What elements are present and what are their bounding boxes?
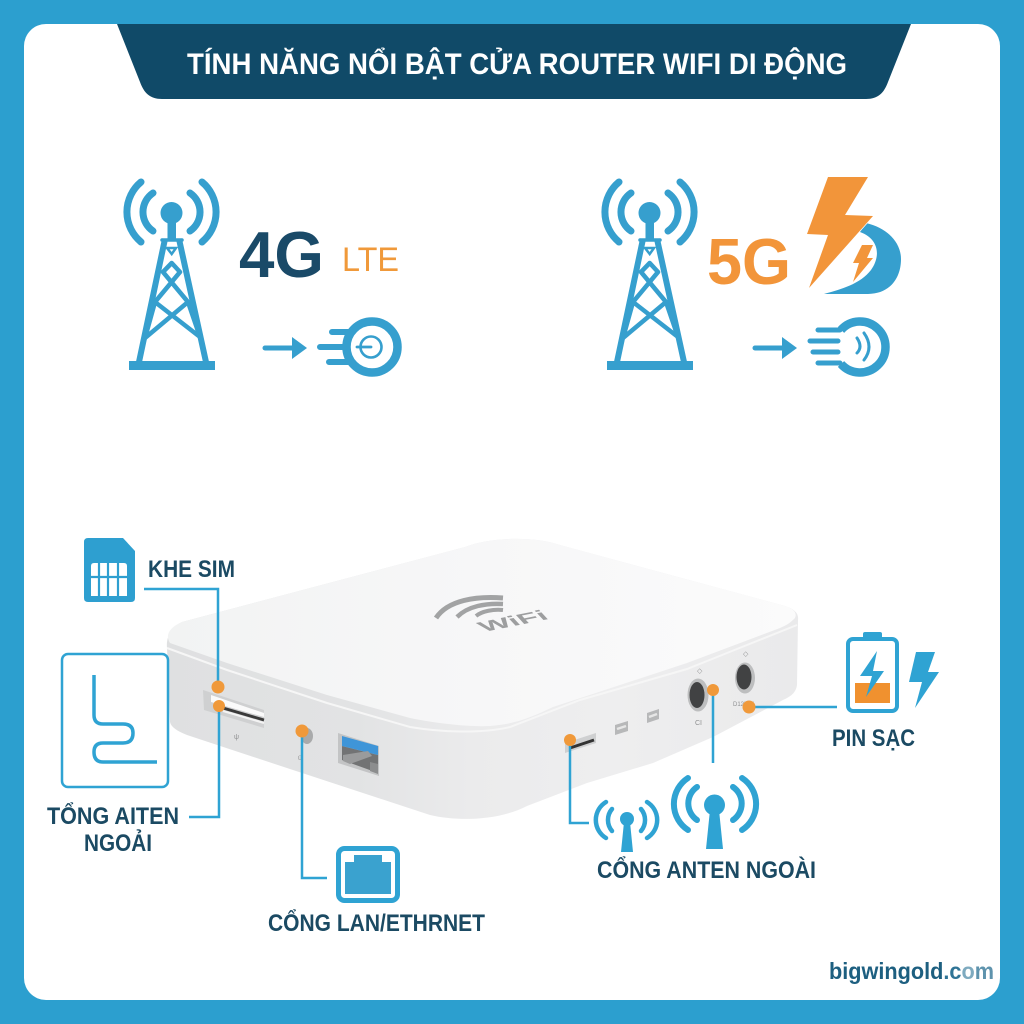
marker [564,734,576,746]
label: CỔNG LAN/ETHRNET [268,909,485,937]
panel: 5G [605,177,901,373]
icon: lightning [909,652,939,708]
tiny port marks: ü [298,755,302,762]
callout: KHE SIM [84,538,235,694]
device top face [168,539,796,726]
tiny port marks: CI [695,720,702,727]
arrow [755,337,797,359]
tiny port marks [234,651,754,762]
icon: 4G cell tower [127,182,216,370]
leader line: side slot [570,745,589,823]
4G label: 4G [239,218,324,291]
device body [167,539,798,819]
wifi logo [436,598,553,635]
tiny port marks: D12MM [733,702,754,708]
marker [296,724,308,738]
title banner [117,24,911,99]
icon: antenna wire [62,654,168,787]
icon: SIM card [84,538,135,602]
callout: PIN SẠC [742,632,939,752]
arrow [265,337,307,359]
panel: 4G LTE [127,182,399,372]
indicator slots [615,709,659,735]
leader line [189,710,219,817]
ethernet port [338,733,379,776]
callout: CỔNG LAN/ETHRNET [268,724,485,937]
label: NGOẢI [84,828,152,857]
antenna jacks [688,662,755,712]
tiny port marks: ψ [234,734,239,741]
label: KHE SIM [148,556,235,583]
callout: TỔNG AITEN NGOẢI [47,654,225,857]
marker [212,680,224,694]
label: PIN SẠC [832,725,915,752]
label: CỔNG ANTEN NGOÀI [597,856,816,884]
5G label: 5G [707,225,791,298]
side slot [565,733,596,753]
callout: CỔNG ANTEN NGOÀI [564,684,816,884]
leader line [144,589,218,683]
marker [213,700,225,712]
marker [707,684,719,696]
leader line: jack [712,693,714,763]
LAN indicator port [301,728,313,744]
tiny port marks: ◇ [743,651,749,658]
leader line [753,706,837,708]
brand logo: bigwingold.com [829,958,994,984]
icon: 4G speed target [320,322,398,372]
SIM slot [203,690,264,728]
icon: LAN port [338,848,398,900]
label [47,802,179,857]
tiny port marks: ◇ [697,668,703,675]
icon: lightning and swoosh [807,177,901,294]
icon: large antenna [674,778,756,849]
LTE label: LTE [342,241,399,279]
icon: 5G speed signal [810,322,886,373]
wifi logo: WiFi [473,607,553,635]
marker [742,700,756,714]
leader line [302,733,327,878]
icon: battery [848,632,897,711]
router device [167,539,798,819]
title: TÍNH NĂNG NỔI BẬT CỬA ROUTER WIFI DI ĐỘNG [187,47,847,81]
icon: small antenna [596,802,657,852]
label: TỔNG AITEN [47,802,179,830]
icon: 5G cell tower [605,182,694,370]
